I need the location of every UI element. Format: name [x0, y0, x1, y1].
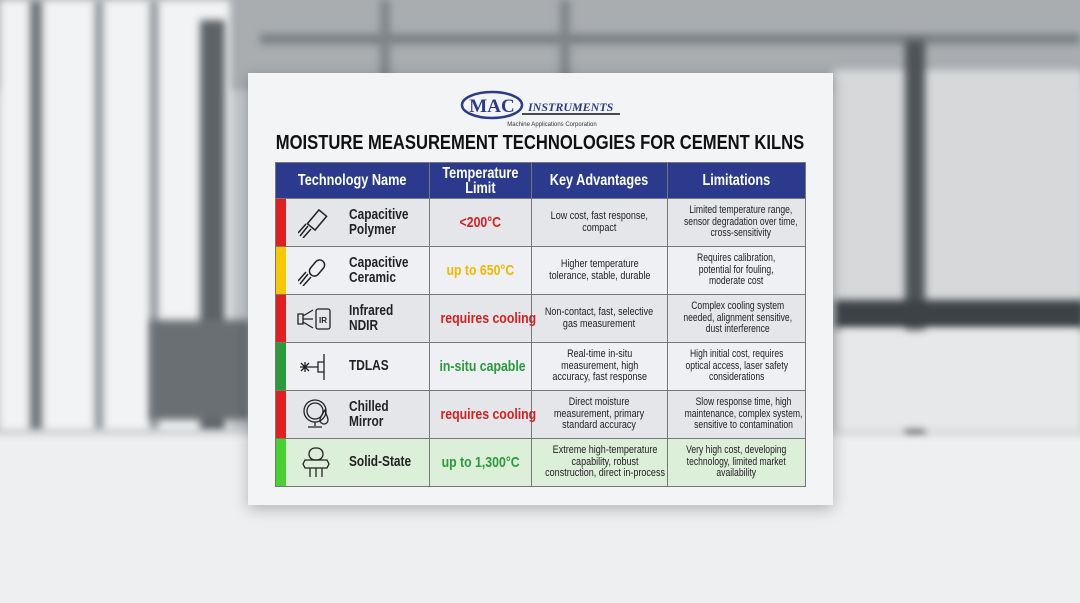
table: sensor degradation over time,: [684, 216, 798, 228]
table: Slow response time, high: [696, 396, 791, 408]
table: sensitive to contamination: [694, 419, 793, 431]
table: Limited temperature range,: [689, 204, 792, 216]
table: High initial cost, requires: [690, 348, 783, 360]
table: in-situ capable: [439, 358, 526, 375]
table: Technology Name: [298, 172, 407, 189]
table: requires cooling: [441, 406, 536, 423]
table: up to 650°C: [447, 262, 514, 279]
table: gas measurement: [563, 318, 636, 330]
logo: MAC: [469, 96, 515, 117]
table: cross-sensitivity: [710, 227, 771, 239]
table: IR: [319, 316, 327, 325]
table: optical access, laser safety: [685, 360, 788, 372]
title: MOISTURE MEASUREMENT TECHNOLOGIES FOR CEMENT KILNS: [276, 132, 804, 154]
table: Temperature: [442, 164, 519, 182]
table: Key Advantages: [550, 172, 649, 189]
table: Capacitive: [349, 254, 408, 270]
card: [248, 73, 833, 505]
table: NDIR: [349, 318, 378, 334]
table: Polymer: [349, 222, 396, 238]
table: measurement, primary: [554, 408, 645, 420]
table: accuracy, fast response: [552, 371, 647, 383]
table: Limit: [465, 180, 496, 196]
table: [275, 162, 806, 487]
table: maintenance, complex system,: [685, 408, 802, 420]
table: Direct moisture: [569, 396, 630, 408]
table: TDLAS: [349, 358, 389, 374]
table: Complex cooling system: [691, 300, 784, 312]
table: Solid-State: [349, 454, 411, 470]
table: requires cooling: [441, 310, 536, 327]
table: Limitations: [703, 172, 770, 189]
table: Mirror: [349, 414, 383, 430]
table: measurement, high: [561, 360, 638, 372]
table: considerations: [709, 371, 764, 383]
table: capability, robust: [572, 456, 639, 468]
table: <200°C: [460, 214, 501, 231]
table: Higher temperature: [561, 258, 638, 270]
table: Capacitive: [349, 206, 408, 222]
table: Chilled: [349, 398, 389, 414]
table: Low cost, fast response,: [551, 210, 648, 222]
table: Real-time in-situ: [567, 348, 632, 360]
table: up to 1,300°C: [441, 454, 520, 471]
table: technology, limited market: [687, 456, 786, 468]
table: availability: [717, 467, 756, 479]
table: Very high cost, developing: [686, 444, 787, 456]
table: Ceramic: [349, 270, 396, 286]
table: standard accuracy: [563, 419, 636, 431]
table: compact: [582, 222, 617, 234]
table: construction, direct in-process: [545, 467, 665, 479]
table: Requires calibration,: [697, 252, 776, 264]
table: needed, alignment sensitive,: [683, 312, 792, 324]
table: Infrared: [349, 302, 393, 318]
logo: INSTRUMENTS: [527, 100, 614, 114]
table: potential for fouling,: [699, 264, 774, 276]
table: moderate cost: [709, 275, 764, 287]
table: tolerance, stable, durable: [549, 270, 650, 282]
logo: [460, 90, 620, 128]
table: Extreme high-temperature: [553, 444, 657, 456]
logo: Machine Applications Corporation: [507, 122, 597, 128]
table: dust interference: [706, 323, 770, 335]
table: Non-contact, fast, selective: [545, 306, 654, 318]
